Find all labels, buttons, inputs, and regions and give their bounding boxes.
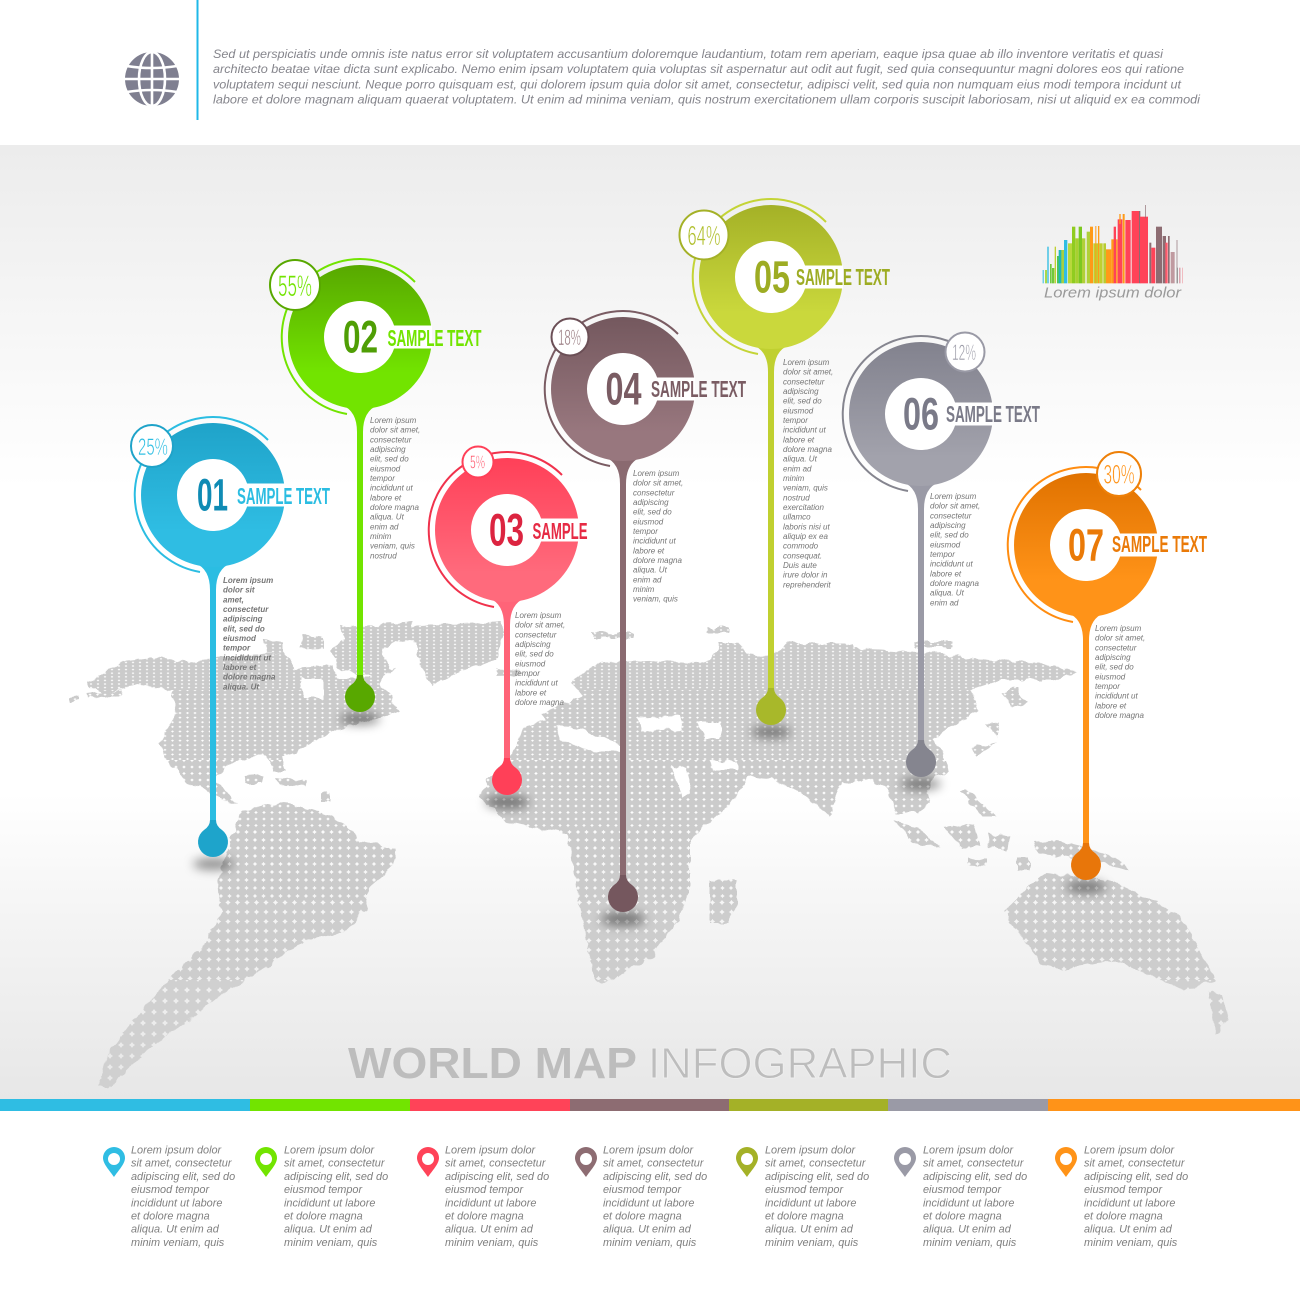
- pin 07: [1008, 452, 1207, 893]
- pin 01 percent badge: 25%: [138, 434, 168, 461]
- legend text 6: et dolore magna: [923, 1210, 1002, 1222]
- pin 01 text: eiusmod: [223, 634, 257, 643]
- pin 07 stem and drop: [1068, 613, 1104, 880]
- pin 06 text: Lorem ipsum: [930, 492, 977, 501]
- pin 07 percent badge: 30%: [1104, 460, 1134, 490]
- legend item 1: [103, 1144, 235, 1249]
- pin 05 text: aliqua. Ut: [783, 455, 818, 464]
- pin 05 text: dolore magna: [783, 445, 832, 454]
- pin 07 text: consectetur: [1095, 643, 1137, 652]
- pin 02 text: adipiscing: [370, 445, 406, 454]
- pin 05 text: aliquip ex ea: [783, 532, 828, 541]
- pin 04 text: Lorem ipsum: [633, 469, 680, 478]
- legend icon 4: [575, 1147, 597, 1177]
- legend text 6: incididunt ut labore: [923, 1197, 1014, 1209]
- legend text 2: sit amet, consectetur: [284, 1158, 385, 1170]
- pin 07 shadow: [1066, 881, 1106, 893]
- pin 05 text: tempor: [783, 416, 808, 425]
- pin 02 shadow: [340, 713, 380, 725]
- pin 06 disc: [843, 336, 993, 491]
- pin 04 text: eiusmod: [633, 517, 664, 526]
- legend item 3: [417, 1144, 549, 1249]
- pin 05 text: ullamco: [783, 513, 811, 522]
- pin 03 disc: [429, 452, 579, 607]
- legend text 6: sit amet, consectetur: [923, 1158, 1024, 1170]
- legend item 4: [575, 1144, 707, 1249]
- legend text 5: Lorem ipsum dolor: [765, 1144, 856, 1156]
- pin 03 number: 03: [489, 504, 524, 556]
- legend text 3: aliqua. Ut enim ad: [445, 1224, 534, 1236]
- pin 03 text: dolor sit amet,: [515, 621, 565, 630]
- pin 01 text: dolore magna: [223, 673, 276, 682]
- legend text 6: eiusmod tempor: [923, 1184, 1001, 1196]
- legend text 7: sit amet, consectetur: [1084, 1158, 1185, 1170]
- legend item 2: [255, 1144, 388, 1249]
- legend text 3: adipiscing elit, sed do: [445, 1171, 549, 1183]
- legend text 6: adipiscing elit, sed do: [923, 1171, 1027, 1183]
- pin 07 label: SAMPLE TEXT: [1112, 531, 1207, 557]
- pin 02 text: eiusmod: [370, 464, 401, 473]
- pin 01 text: Lorem ipsum: [223, 576, 273, 585]
- pin 01 stem and drop: [195, 563, 231, 857]
- pin 01 shadow: [193, 858, 233, 870]
- legend text 5: adipiscing elit, sed do: [765, 1171, 869, 1183]
- pin 06 text: labore et: [930, 569, 962, 578]
- pin 05 stem and drop: [753, 345, 789, 725]
- pin 07 text: adipiscing: [1095, 653, 1131, 662]
- pin 07 disc: [1008, 467, 1158, 622]
- pin 05 text: exercitation: [783, 503, 824, 512]
- pin 05 text: elit, sed do: [783, 397, 822, 406]
- legend text 4: Lorem ipsum dolor: [603, 1144, 694, 1156]
- legend text 1: eiusmod tempor: [131, 1184, 209, 1196]
- pin 02 text: elit, sed do: [370, 455, 409, 464]
- pin 01 label: SAMPLE TEXT: [237, 483, 330, 509]
- pin 05 text: minim: [783, 474, 805, 483]
- pin 05 percent badge: 64%: [688, 220, 720, 251]
- pin 06 text: consectetur: [930, 511, 972, 520]
- legend text 3: sit amet, consectetur: [445, 1158, 546, 1170]
- legend item 7: [1055, 1144, 1188, 1249]
- pin 03 percent badge: [462, 446, 494, 478]
- legend text 3: eiusmod tempor: [445, 1184, 523, 1196]
- pin 05 text: reprehenderit: [783, 580, 831, 589]
- pin 02 text: dolor sit amet,: [370, 426, 420, 435]
- legend text 6: aliqua. Ut enim ad: [923, 1224, 1012, 1236]
- pin 07 text: labore et: [1095, 701, 1127, 710]
- legend icon 7: [1055, 1147, 1077, 1177]
- legend text 3: incididunt ut labore: [445, 1197, 536, 1209]
- pin 05 text: laboris nisi ut: [783, 522, 830, 531]
- pin 04 text: dolore magna: [633, 556, 682, 565]
- pin 01 text: adipiscing: [223, 615, 263, 624]
- colour legend bar: [0, 1099, 1300, 1111]
- pin 01: [131, 417, 330, 870]
- pin 05 text: consequat.: [783, 551, 822, 560]
- pin 05 text: veniam, quis: [783, 484, 828, 493]
- pin 06 number: 06: [903, 388, 939, 440]
- pin 03 percent badge: 5%: [470, 452, 485, 472]
- pin 02 percent badge: 55%: [278, 270, 312, 303]
- legend icon 1: [103, 1147, 125, 1177]
- legend item 5: [736, 1144, 869, 1249]
- legend text 6: Lorem ipsum dolor: [923, 1144, 1014, 1156]
- legend text 7: adipiscing elit, sed do: [1084, 1171, 1188, 1183]
- pin 05 text: Lorem ipsum: [783, 358, 830, 367]
- pin 03 text: eiusmod: [515, 659, 546, 668]
- pin 03 label: SAMPLE: [532, 518, 588, 544]
- pin 06 percent badge: [946, 332, 984, 372]
- legend text 4: sit amet, consectetur: [603, 1158, 704, 1170]
- pin 04 text: minim: [633, 585, 655, 594]
- legend text 3: Lorem ipsum dolor: [445, 1144, 536, 1156]
- pin 04 text: labore et: [633, 546, 665, 555]
- pin 01 text: labore et: [223, 663, 257, 672]
- header divider line: [196, 0, 198, 120]
- pin 02 text: incididunt ut: [370, 484, 413, 493]
- pin 07 text: dolore magna: [1095, 711, 1144, 720]
- pin 04 shadow: [601, 912, 645, 926]
- legend text 6: minim veniam, quis: [923, 1237, 1017, 1249]
- legend text 1: sit amet, consectetur: [131, 1158, 232, 1170]
- pin 05: [680, 199, 890, 738]
- pin 04 text: dolor sit amet,: [633, 479, 683, 488]
- pin 06 shadow: [901, 778, 941, 790]
- legend icon 3: [417, 1147, 439, 1177]
- pin 01 number: 01: [197, 470, 228, 520]
- pin 02 text: minim: [370, 532, 392, 541]
- pin 02 label: SAMPLE TEXT: [388, 325, 482, 351]
- pin 04: [545, 311, 746, 926]
- header intro text: Sed ut perspiciatis unde omnis iste natus error sit voluptatem accusantium doloremque laudantium, totam rem aperiam, eaque ipsa quae ab illo inventore veritatis et quasi: [213, 47, 1163, 61]
- pin 02 text: nostrud: [370, 551, 397, 560]
- dotted world map: [60, 610, 1240, 1100]
- pin 03 stem and drop: [489, 598, 525, 795]
- legend text 7: Lorem ipsum dolor: [1084, 1144, 1175, 1156]
- legend text 2: adipiscing elit, sed do: [284, 1171, 388, 1183]
- panel: map backdrop: [0, 145, 1300, 1099]
- legend text 2: et dolore magna: [284, 1210, 363, 1222]
- legend text 7: eiusmod tempor: [1084, 1184, 1162, 1196]
- pin 05 text: nostrud: [783, 493, 810, 502]
- pin 07 text: elit, sed do: [1095, 663, 1134, 672]
- pin 06 text: elit, sed do: [930, 531, 969, 540]
- pin 07 text: incididunt ut: [1095, 692, 1138, 701]
- pin 03 text: adipiscing: [515, 640, 551, 649]
- pin 05 text: enim ad: [783, 464, 812, 473]
- legend text 4: incididunt ut labore: [603, 1197, 694, 1209]
- pin 05 number: 05: [754, 252, 790, 302]
- legend text 2: Lorem ipsum dolor: [284, 1144, 375, 1156]
- legend text 7: et dolore magna: [1084, 1210, 1163, 1222]
- legend text 1: Lorem ipsum dolor: [131, 1144, 222, 1156]
- pin 03 shadow: [485, 795, 529, 809]
- legend text 5: eiusmod tempor: [765, 1184, 843, 1196]
- pin 03 text: elit, sed do: [515, 650, 554, 659]
- legend text 4: adipiscing elit, sed do: [603, 1171, 707, 1183]
- pin 02 stem and drop: [342, 405, 378, 712]
- pin 04 number: 04: [606, 364, 642, 414]
- pin 05 text: commodo: [783, 542, 819, 551]
- legend icon 5: [736, 1147, 758, 1177]
- pin 06 text: tempor: [930, 550, 955, 559]
- pin 04 percent badge: 18%: [558, 325, 581, 350]
- pin 03 text: dolore magna: [515, 698, 564, 707]
- legend text 2: incididunt ut labore: [284, 1197, 375, 1209]
- pin 01 text: dolor sit: [223, 586, 255, 595]
- pin 07 text: eiusmod: [1095, 672, 1126, 681]
- pin 01 text: incididunt ut: [223, 653, 271, 662]
- pin 07 number: 07: [1068, 520, 1104, 570]
- legend icon 6: [894, 1147, 916, 1177]
- pin 04 label: SAMPLE TEXT: [651, 376, 746, 402]
- legend text 2: aliqua. Ut enim ad: [284, 1224, 373, 1236]
- legend text 3: minim veniam, quis: [445, 1237, 539, 1249]
- pin 05 text: labore et: [783, 435, 815, 444]
- legend text 7: aliqua. Ut enim ad: [1084, 1224, 1173, 1236]
- pin 05 text: Duis aute: [783, 561, 817, 570]
- legend item 6: [894, 1144, 1027, 1249]
- pin 07 percent badge: [1097, 452, 1141, 496]
- pin 06: [843, 332, 1040, 790]
- legend text 4: eiusmod tempor: [603, 1184, 681, 1196]
- pin 02 percent badge: [270, 260, 320, 310]
- pin 03 text: tempor: [515, 669, 540, 678]
- header intro text: architecto beatae vitae dicta sunt explicabo. Nemo enim ipsam voluptatem quia voluptas sit aspernatur aut odit aut fugit, sed quia consequuntur magni dolores eos qui ratione: [213, 62, 1184, 76]
- pin 02 text: enim ad: [370, 522, 399, 531]
- pin 02 disc: [282, 259, 432, 414]
- pin 02 text: consectetur: [370, 435, 412, 444]
- legend text 5: et dolore magna: [765, 1210, 844, 1222]
- pin 04 text: enim ad: [633, 575, 662, 584]
- pin 04 text: veniam, quis: [633, 595, 678, 604]
- pin 02 text: veniam, quis: [370, 542, 415, 551]
- pin 03: [429, 446, 588, 809]
- pin 02 text: Lorem ipsum: [370, 416, 417, 425]
- pin 05 label: SAMPLE TEXT: [796, 264, 890, 290]
- header intro text: voluptatem sequi nesciunt. Neque porro quisquam est, qui dolorem ipsum quia dolor sit amet, consectetur, adipisci velit, sed quia non numquam eius modi tempora incidunt ut: [213, 78, 1182, 92]
- header icon: globe: [125, 52, 179, 106]
- legend text 1: minim veniam, quis: [131, 1237, 225, 1249]
- pin 06 text: eiusmod: [930, 540, 961, 549]
- pin 07 text: tempor: [1095, 682, 1120, 691]
- pin 01 percent badge: [131, 425, 173, 467]
- pin 04 disc: [545, 311, 695, 466]
- pin 04 text: elit, sed do: [633, 508, 672, 517]
- legend text 4: minim veniam, quis: [603, 1237, 697, 1249]
- legend text 1: et dolore magna: [131, 1210, 210, 1222]
- pin 05 text: incididunt ut: [783, 426, 826, 435]
- pin 05 shadow: [751, 726, 791, 738]
- legend icon 2: [255, 1147, 277, 1177]
- legend text 2: minim veniam, quis: [284, 1237, 378, 1249]
- pin 04 percent badge: [552, 318, 588, 356]
- pin 05 disc: [693, 199, 843, 354]
- pin 06 stem and drop: [903, 482, 939, 777]
- pin 01 text: tempor: [223, 644, 251, 653]
- pin 04 text: adipiscing: [633, 498, 669, 507]
- pin 02: [270, 259, 482, 725]
- legend text 1: adipiscing elit, sed do: [131, 1171, 235, 1183]
- pin 05 percent badge: [680, 210, 728, 260]
- pin 04 text: tempor: [633, 527, 658, 536]
- pin 01 text: aliqua. Ut: [223, 682, 259, 691]
- pin 05 text: irure dolor in: [783, 571, 828, 580]
- pin 06 text: dolor sit amet,: [930, 502, 980, 511]
- pin 03 text: incididunt ut: [515, 679, 558, 688]
- legend text 3: et dolore magna: [445, 1210, 524, 1222]
- pin 05 text: eiusmod: [783, 406, 814, 415]
- pin 06 label: SAMPLE TEXT: [946, 401, 1040, 427]
- pin 05 text: adipiscing: [783, 387, 819, 396]
- header intro text: [213, 47, 1200, 106]
- pin 01 text: elit, sed do: [223, 624, 265, 633]
- legend text 7: minim veniam, quis: [1084, 1237, 1178, 1249]
- pin 05 text: consectetur: [783, 377, 825, 386]
- header intro text: labore et dolore magnam aliquam quaerat voluptatem. Ut enim ad minima veniam, quis nostrum exercitationem ullam corporis suscipit laboriosam, nisi ut aliquid ex ea commodi: [213, 92, 1200, 106]
- legend text 2: eiusmod tempor: [284, 1184, 362, 1196]
- title: WORLD MAP: [348, 1039, 637, 1088]
- pin 03 text: labore et: [515, 688, 547, 697]
- legend text 7: incididunt ut labore: [1084, 1197, 1175, 1209]
- legend text 5: incididunt ut labore: [765, 1197, 856, 1209]
- pin 01 text: consectetur: [223, 605, 269, 614]
- title: [348, 1039, 952, 1088]
- pin 06 text: incididunt ut: [930, 560, 973, 569]
- legend text 5: aliqua. Ut enim ad: [765, 1224, 854, 1236]
- pin 06 percent badge: 12%: [952, 340, 976, 365]
- pin 07 text: Lorem ipsum: [1095, 624, 1142, 633]
- pin 06 text: adipiscing: [930, 521, 966, 530]
- pin 02 text: tempor: [370, 474, 395, 483]
- pin 02 number: 02: [343, 312, 378, 362]
- pin 02 text: aliqua. Ut: [370, 513, 405, 522]
- pin 04 text: aliqua. Ut: [633, 566, 668, 575]
- title: INFOGRAPHIC: [648, 1039, 952, 1088]
- pin 05 text: dolor sit amet,: [783, 368, 833, 377]
- pin 07 text: dolor sit amet,: [1095, 634, 1145, 643]
- legend text 1: aliqua. Ut enim ad: [131, 1224, 220, 1236]
- pin 01 disc: [135, 417, 285, 572]
- legend text 5: sit amet, consectetur: [765, 1158, 866, 1170]
- legend text 5: minim veniam, quis: [765, 1237, 859, 1249]
- pin 06 text: aliqua. Ut: [930, 589, 965, 598]
- pin 01 text: amet,: [223, 595, 244, 604]
- pin 04 text: incididunt ut: [633, 537, 676, 546]
- mini bar chart: [1043, 205, 1183, 283]
- pin 03 text: consectetur: [515, 630, 557, 639]
- pin 04 stem and drop: [605, 457, 641, 912]
- pin 02 text: labore et: [370, 493, 402, 502]
- pin 06 text: dolore magna: [930, 579, 979, 588]
- pin 06 text: enim ad: [930, 598, 959, 607]
- pin 04 text: consectetur: [633, 488, 675, 497]
- legend text 1: incididunt ut labore: [131, 1197, 222, 1209]
- pin 02 text: dolore magna: [370, 503, 419, 512]
- legend text 4: aliqua. Ut enim ad: [603, 1224, 692, 1236]
- pin 03 text: Lorem ipsum: [515, 611, 562, 620]
- chart caption: Lorem ipsum dolor: [1044, 284, 1182, 302]
- legend text 4: et dolore magna: [603, 1210, 682, 1222]
